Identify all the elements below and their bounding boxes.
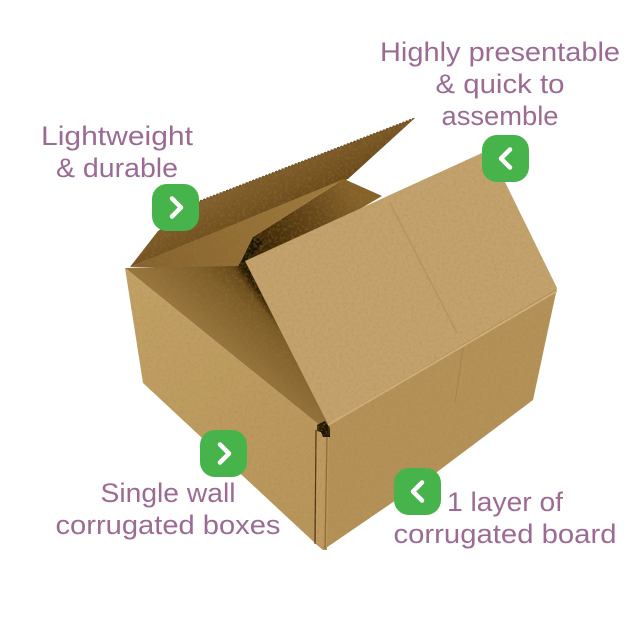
icon: green left chevron button, bottom right [394,468,441,515]
corner slot [317,421,330,437]
label: single wall corrugated boxes: corrugated boxes [56,510,280,540]
face crease [455,348,463,403]
box interior back wall [236,179,382,270]
icon: green left chevron button, top right [482,135,529,182]
flap shadow [234,262,276,324]
label: highly presentable and quick to assemble: assemble [442,101,558,131]
fold highlight [328,291,557,425]
label: highly presentable and quick to assemble: & quick to [436,69,564,99]
dark gap shadow [238,237,264,268]
back flap interior [130,118,415,267]
corner tab [316,428,329,550]
label: one layer of corrugated board [394,487,616,549]
cardboard box illustration [125,118,557,550]
lid crease [390,203,457,333]
right lid flap [245,153,557,424]
label: highly presentable and quick to assemble [380,37,620,131]
label: highly presentable and quick to assemble: Highly presentable [380,37,620,67]
right face [316,288,557,550]
label: one layer of corrugated board: 1 layer of [447,487,564,517]
icon: green right chevron button, top left [152,184,199,231]
lower left flap [125,260,330,424]
icon: green right chevron button, bottom left [200,430,247,477]
serrated flap edge [200,118,415,201]
label: one layer of corrugated board: corrugated board [394,519,616,549]
label: single wall corrugated boxes: Single wall [100,478,236,508]
left face [125,268,318,544]
label: lightweight and durable: Lightweight [41,121,194,151]
label: lightweight and durable: & durable [56,153,178,183]
inner folded flap [130,179,344,269]
label: single wall corrugated boxes [56,478,280,540]
corner seam [315,430,316,544]
tab edge [325,437,327,549]
label: lightweight and durable [41,121,194,183]
infographic [43,42,619,550]
